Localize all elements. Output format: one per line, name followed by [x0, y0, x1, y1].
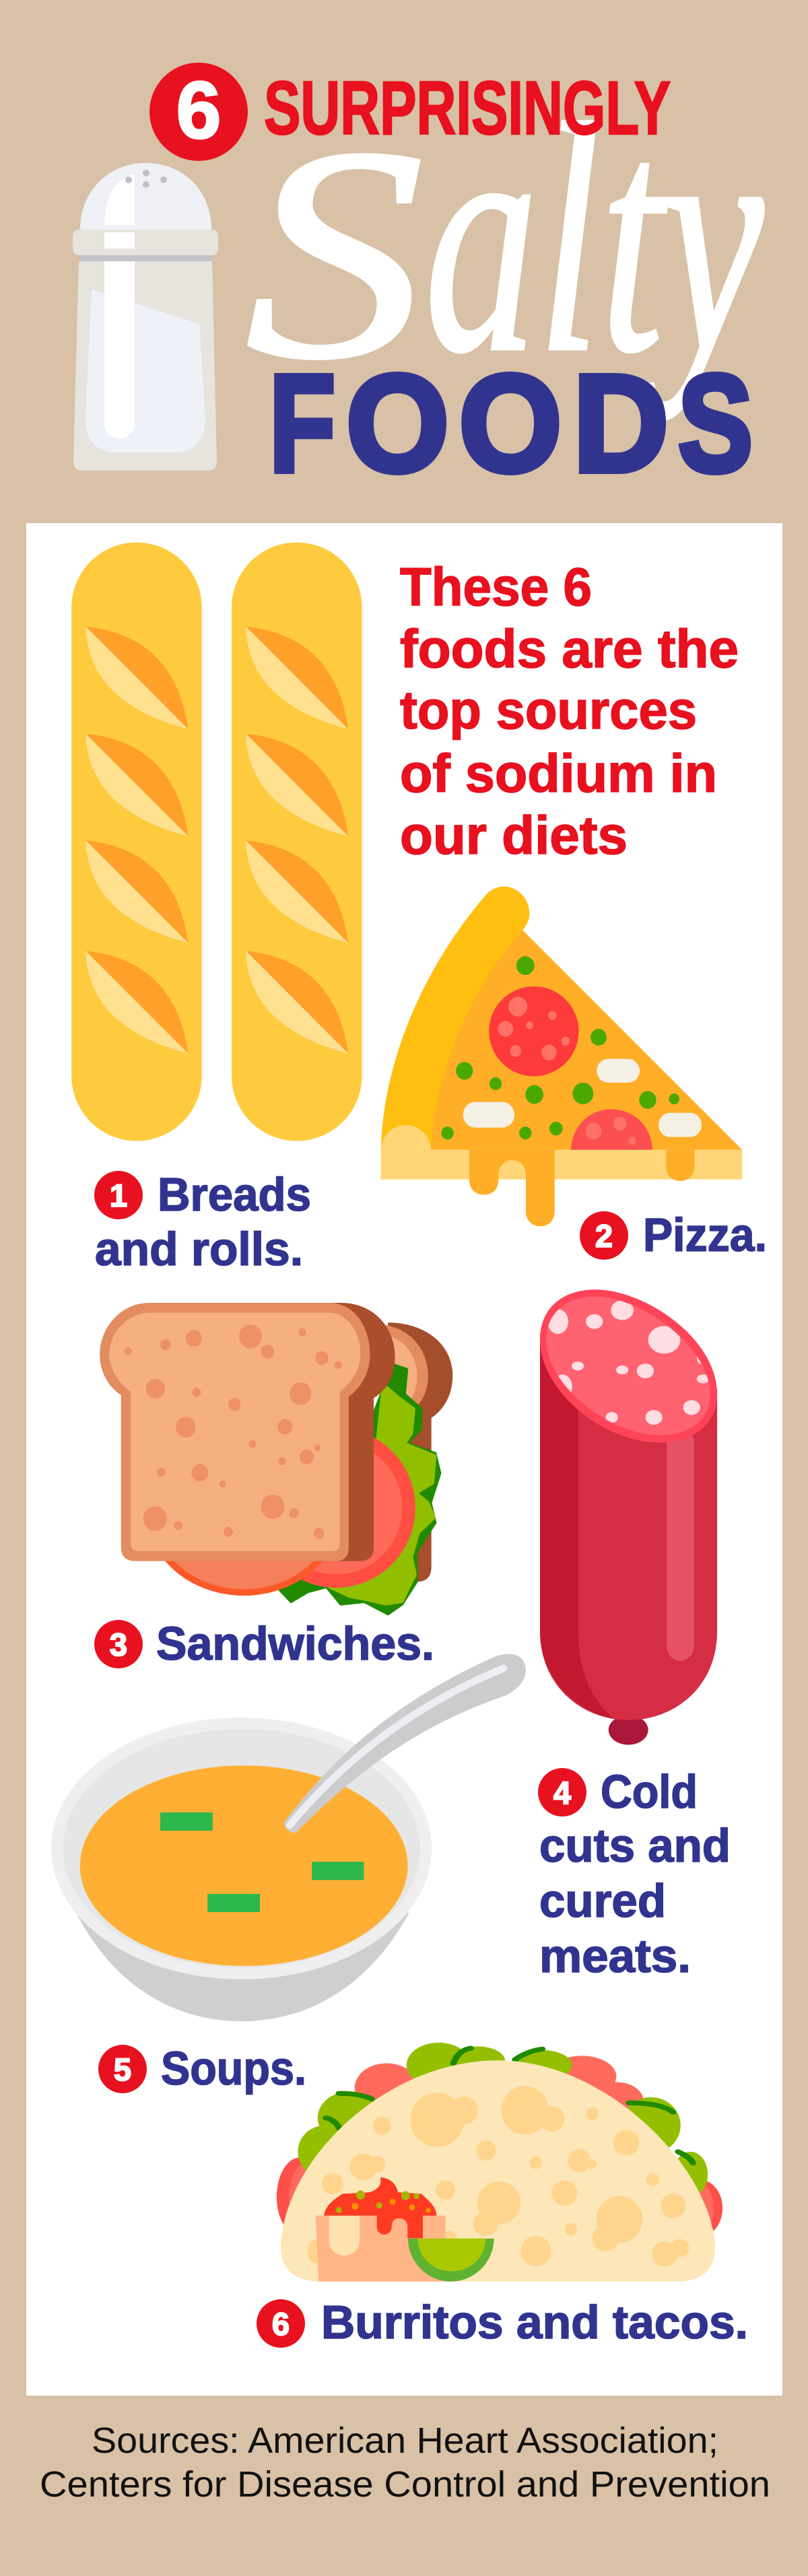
intro text: of sodium in [400, 743, 717, 803]
label: pizza: Pizza. [643, 1209, 767, 1261]
title word: Salty: S [245, 86, 424, 421]
title word: Foods: F [269, 346, 335, 501]
panel: white content area [26, 523, 782, 2396]
icon: bread loaves [71, 543, 362, 1141]
sources footer: Centers for Disease Control and Prevention [40, 2464, 770, 2505]
title word: Foods: D [573, 346, 669, 501]
intro text: our diets [400, 805, 628, 865]
icon: salt shaker [73, 163, 218, 471]
label: breads and rolls: Breads [158, 1168, 311, 1221]
sources footer [40, 2420, 770, 2505]
icon: sandwich [100, 1303, 452, 1614]
label: cold cuts and cured meats: cuts and [539, 1819, 731, 1872]
intro text: foods are the [400, 619, 739, 679]
icon: taco with salsa and lime [277, 2043, 722, 2282]
label: cold cuts and cured meats: meats. [539, 1930, 691, 1982]
icon: soup bowl with spoon [51, 1654, 526, 2021]
title word: Foods: O [459, 346, 562, 501]
label: pizza: 2 [595, 1218, 613, 1254]
label: soups: 5 [114, 2052, 131, 2087]
title word: Foods: S [678, 346, 753, 501]
label: cold cuts and cured meats: 4 [553, 1775, 571, 1810]
intro text [400, 557, 739, 865]
label: soups: Soups. [161, 2042, 306, 2095]
icon: number 6 badge in title [149, 63, 248, 161]
label: breads and rolls: 1 [110, 1178, 127, 1213]
intro text: These 6 [400, 557, 592, 617]
label: pizza [580, 1209, 767, 1261]
sources footer: Sources: American Heart Association; [92, 2420, 718, 2461]
icon: number 6 badge in title: 6 [176, 65, 221, 156]
label: cold cuts and cured meats: Cold [601, 1765, 698, 1818]
label: breads and rolls [94, 1168, 311, 1275]
title word: Surprisingly: SURPRISINGLY [264, 66, 671, 150]
label: burritos and tacos: Burritos and tacos. [321, 2296, 748, 2348]
label: sandwiches: 3 [110, 1627, 127, 1662]
label: sandwiches: Sandwiches. [156, 1617, 434, 1670]
label: breads and rolls: and rolls. [95, 1223, 303, 1275]
label: soups [98, 2042, 306, 2095]
intro text: top sources [400, 680, 697, 740]
label: cold cuts and cured meats [538, 1765, 731, 1982]
label: cold cuts and cured meats: cured [539, 1874, 666, 1927]
icon: pizza slice [381, 887, 742, 1226]
icon: cured salami [540, 1289, 717, 1744]
title word: Foods: O [346, 346, 449, 501]
label: burritos and tacos: 6 [272, 2306, 290, 2342]
